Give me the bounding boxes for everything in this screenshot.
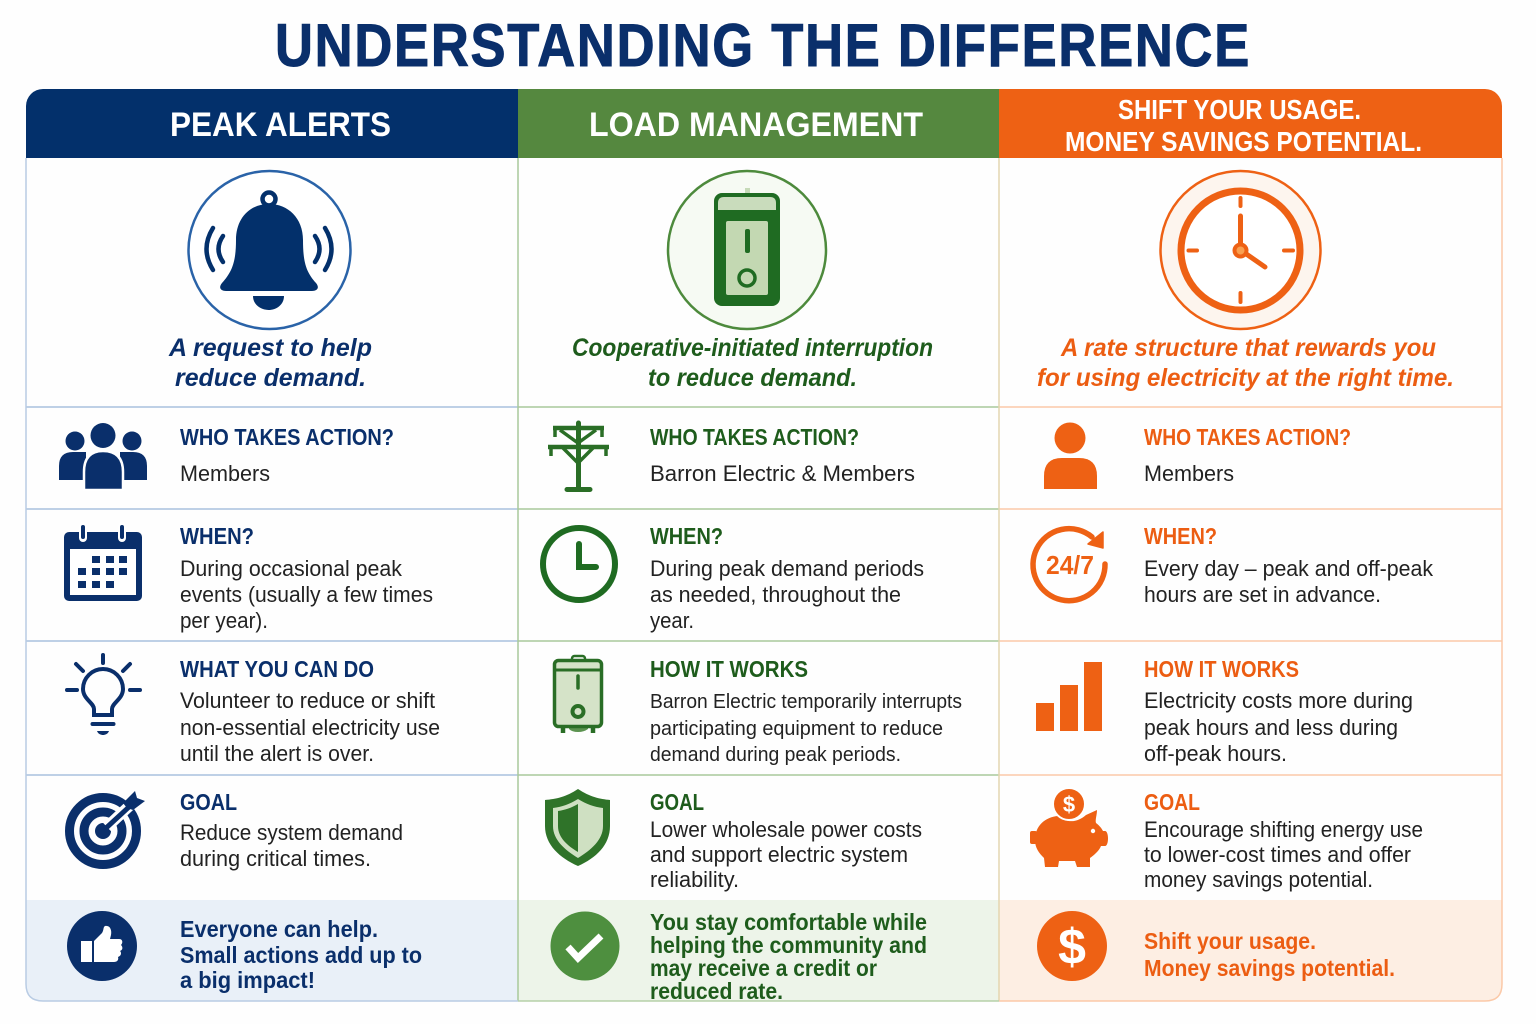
row: who takes action: Barron Electric & Members [650,461,915,486]
row: when [650,523,924,633]
row: when: WHEN? [650,523,723,549]
row: how it works: HOW IT WORKS [1144,656,1299,682]
callout: shift your usage: Money savings potential. [1144,955,1395,981]
row: when: During occasional peak [180,556,403,581]
row: goal [650,789,922,892]
row: when: WHEN? [180,523,254,549]
tagline: load management: to reduce demand. [648,364,857,392]
row: when [180,523,433,633]
row: how it works [650,656,962,766]
callout: stay comfortable: may receive a credit or [650,955,877,981]
callout: everyone can help: Small actions add up to [180,942,422,968]
row: when: WHEN? [1144,523,1217,549]
row: what you can do: Volunteer to reduce or shift [180,688,435,713]
row: who takes action: WHO TAKES ACTION? [650,424,859,450]
tagline: shift your usage [1037,334,1454,392]
row: how it works: demand during peak periods. [650,744,901,766]
row: when: as needed, throughout the [650,582,901,607]
icon: bar chart [1036,662,1102,731]
heading: shift your usage [1065,94,1422,157]
heading: peak alerts: PEAK ALERTS [170,106,391,144]
row: when: hours are set in advance. [1144,582,1381,607]
panel: load management [543,106,962,1004]
row: who takes action: WHO TAKES ACTION? [1144,424,1351,450]
row: how it works: Electricity costs more during [1144,688,1413,713]
callout: everyone can help [180,916,422,993]
row: what you can do: until the alert is over. [180,741,374,766]
row: goal: during critical times. [180,846,371,871]
row: goal: GOAL [180,789,237,815]
row: what you can do [180,656,440,766]
callout: shift your usage [1144,928,1395,981]
icon: shield [545,789,610,866]
row: when: per year). [180,608,268,633]
tagline: load management: Cooperative-initiated interruption [572,334,933,362]
icon: target with arrow [70,791,145,864]
row: when: year. [650,608,694,633]
row: goal: reliability. [650,867,739,892]
row: how it works: Barron Electric temporarily interrupts [650,691,962,713]
row: when [1144,523,1434,607]
heading: shift your usage: SHIFT YOUR USAGE. [1118,94,1361,125]
row: when: Every day – peak and off-peak [1144,556,1434,581]
callout: stay comfortable [650,909,927,1004]
row: goal: Reduce system demand [180,820,403,845]
row: how it works: participating equipment to reduce [650,718,943,740]
icon: check mark [550,912,620,980]
callout: stay comfortable: helping the community and [650,932,927,958]
row: who takes action [180,424,394,486]
callout: everyone can help: a big impact! [180,967,315,993]
heading: shift your usage: MONEY SAVINGS POTENTIAL. [1065,126,1422,157]
row: goal [180,789,403,871]
callout: stay comfortable: reduced rate. [650,978,783,1004]
row: goal [1144,789,1423,892]
icon: utility pole [548,423,609,490]
icon: light bulb [67,655,140,735]
icon: water heater [554,656,602,733]
row: when: events (usually a few times [180,582,433,607]
heading: load management: LOAD MANAGEMENT [589,106,923,144]
callout: everyone can help: Everyone can help. [180,916,378,942]
callout: shift your usage: Shift your usage. [1144,928,1316,954]
tagline: shift your usage: for using electricity at the right time. [1037,364,1454,392]
icon: group of people [59,423,147,490]
icon: dollar coin: $ [1058,919,1086,975]
row: who takes action [650,424,915,486]
tagline: shift your usage: A rate structure that rewards you [1060,334,1436,362]
icon: person [1044,422,1097,489]
tagline: peak alerts: A request to help [168,334,372,362]
row: who takes action [1144,424,1351,486]
icon: piggy bank [1030,788,1108,867]
row: who takes action: Members [180,461,270,486]
tagline: peak alerts [168,334,372,392]
row: goal: to lower-cost times and offer [1144,842,1411,867]
row: how it works: HOW IT WORKS [650,656,808,682]
icon: piggy bank: $ [1063,792,1075,817]
row: goal: and support electric system [650,842,908,867]
row: when: During peak demand periods [650,556,924,581]
row: what you can do: WHAT YOU CAN DO [180,656,374,682]
row: how it works [1144,656,1413,766]
row: how it works: peak hours and less during [1144,715,1398,740]
title: UNDERSTANDING THE DIFFERENCE [275,12,1251,79]
row: goal: Lower wholesale power costs [650,817,922,842]
callout: stay comfortable: You stay comfortable while [650,909,927,935]
icon: rocker switch [668,171,826,329]
row: goal: GOAL [650,789,704,815]
row: goal: Encourage shifting energy use [1144,817,1423,842]
icon: calendar [64,526,142,601]
row: goal: GOAL [1144,789,1200,815]
row: what you can do: non-essential electricity use [180,715,440,740]
row: who takes action: Members [1144,461,1234,486]
panel: shift your usage [1030,94,1454,981]
icon: 24/7 circular arrow: 24/7 [1046,550,1094,580]
icon: thumbs up [67,911,137,981]
row: goal: money savings potential. [1144,867,1373,892]
panel: peak alerts [59,106,440,993]
row: who takes action: WHO TAKES ACTION? [180,424,394,450]
tagline: load management [572,334,933,392]
icon: clock [543,528,615,600]
icon: wall clock [1160,171,1320,329]
icon: dollar coin [1037,911,1107,981]
tagline: peak alerts: reduce demand. [175,364,366,392]
icon: ringing bell [188,171,350,329]
icon: 24/7 circular arrow [1033,529,1105,601]
row: how it works: off-peak hours. [1144,741,1287,766]
